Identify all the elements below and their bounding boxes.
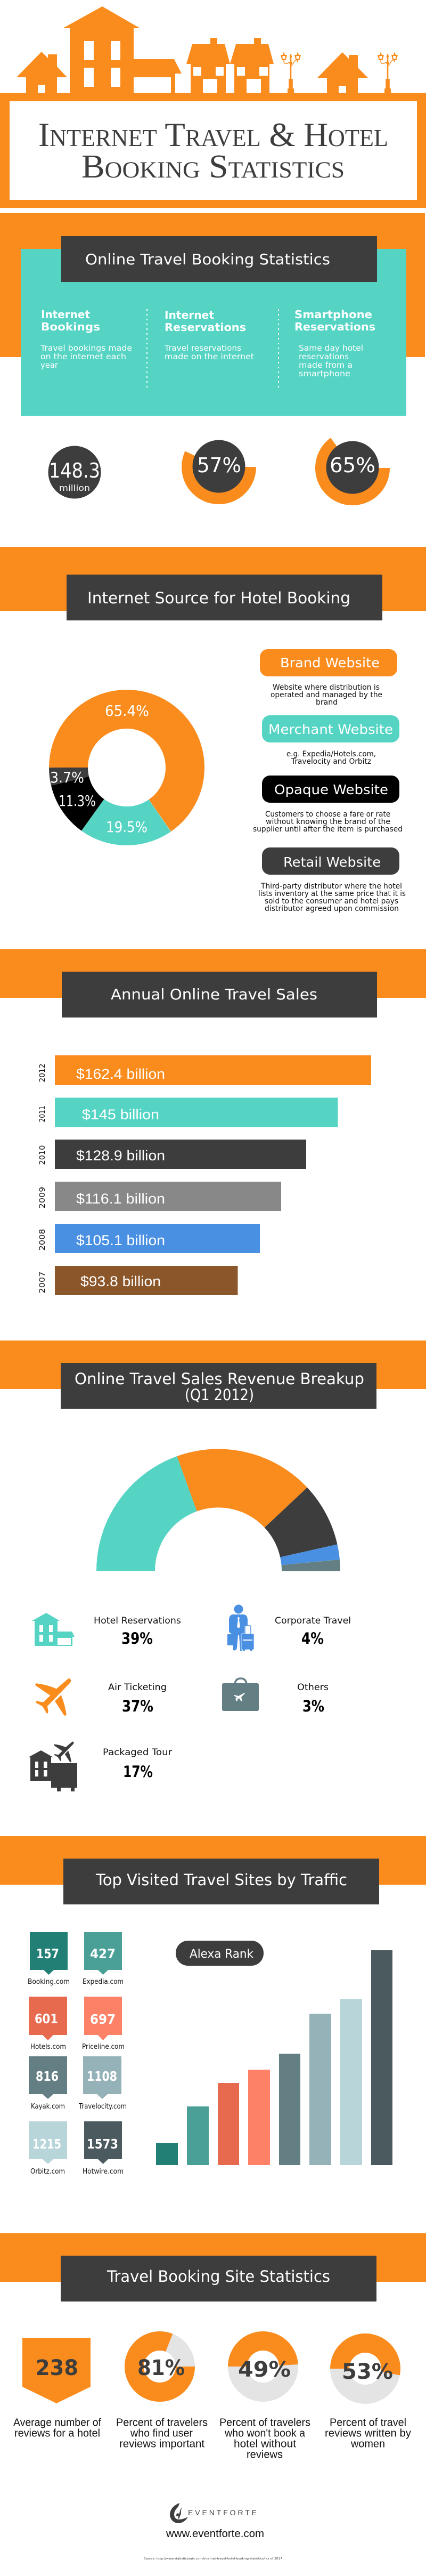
tag: hotels.com <box>29 1997 67 2051</box>
stat: 81 percent donut: Percent of travelers <box>116 2417 208 2428</box>
bar chart: yearly sales <box>38 1055 371 1295</box>
stat: 53 percent donut: 53% <box>342 2360 393 2384</box>
stat: 49 percent donut <box>219 2341 310 2460</box>
column: smartphone reservations: Same day hotel <box>299 343 363 353</box>
bar 2007: 2007 <box>38 1272 47 1293</box>
section heading: Online Travel Sales Revenue Breakup <box>75 1370 364 1388</box>
stat: packaged tour <box>103 1747 172 1781</box>
stat: 49 percent donut: 49% <box>238 2357 291 2382</box>
stat: packaged tour: Packaged Tour <box>103 1747 172 1758</box>
tag: orbitz.com <box>29 2121 67 2176</box>
legend: opaque website: Customers to choose a fare or rate <box>265 810 390 819</box>
legend: retail website: distributor agreed upon commission <box>265 905 399 913</box>
legend: retail website: lists inventory at the same price that it is <box>258 890 406 898</box>
stat: corporate travel <box>275 1616 351 1648</box>
legend: opaque website: Opaque Website <box>274 782 388 797</box>
tag: orbitz.com: Orbitz.com <box>30 2168 65 2176</box>
logo: eventforte <box>170 2503 257 2523</box>
donut chart: 3.7% <box>50 769 84 786</box>
icon: twin house one <box>186 38 230 94</box>
tag: hotwire.com: Hotwire.com <box>83 2168 124 2176</box>
column: smartphone reservations: made from a <box>299 360 353 370</box>
icon: airplane <box>35 1678 71 1716</box>
icon: small house right <box>317 52 368 94</box>
stat: 81 percent donut: 81% <box>137 2356 185 2380</box>
stat: 49 percent donut: hotel without <box>234 2438 296 2450</box>
legend: brand website: Brand Website <box>280 655 380 671</box>
stat: 238 reviews badge: reviews for a hotel <box>14 2427 100 2439</box>
stat: 81 percent donut: reviews important <box>119 2438 204 2450</box>
tag: hotwire.com <box>83 2121 124 2176</box>
bar 2010: 2010 <box>38 1145 47 1165</box>
stat: hotel reservations: 39% <box>121 1629 153 1648</box>
donut chart: 65.4% <box>105 702 149 720</box>
tag: booking.com: 157 <box>36 1946 59 1961</box>
tag: hotwire.com: 1573 <box>87 2136 118 2152</box>
legend: brand website <box>260 649 397 707</box>
legend: merchant website: e.g. Expedia/Hotels.com, <box>286 750 376 758</box>
legend: brand website: Website where distribution is <box>273 683 380 692</box>
stat: 49 percent donut: reviews <box>247 2449 283 2460</box>
legend: merchant website: Merchant Website <box>268 722 393 737</box>
column: internet reservations <box>164 309 254 361</box>
stat: corporate travel: Corporate Travel <box>275 1616 351 1626</box>
tag: expedia.com <box>83 1932 124 1986</box>
panel: top visited travel sites <box>0 1836 426 2176</box>
tag: priceline.com: 697 <box>90 2012 116 2027</box>
legend: brand website: brand <box>316 698 338 707</box>
stat: others: Others <box>297 1682 329 1693</box>
tag: expedia.com: Expedia.com <box>83 1978 124 1986</box>
icon: corporate traveller <box>227 1604 254 1651</box>
title text <box>38 116 388 185</box>
legend pill: alexa rank <box>176 1941 264 1966</box>
column: internet reservations: Internet <box>165 309 214 321</box>
title text: Booking Statistics <box>81 149 345 185</box>
tag: booking.com: Booking.com <box>28 1978 70 1986</box>
stat: 49 percent donut: Percent of travelers <box>219 2417 310 2428</box>
column: internet bookings: year <box>40 360 59 370</box>
bar 2010 <box>38 1140 306 1169</box>
bar 2012: $162.4 billion <box>76 1066 165 1082</box>
bar 2008: $105.1 billion <box>76 1232 165 1248</box>
tag: kayak.com: 816 <box>36 2069 59 2084</box>
tag: kayak.com: Kayak.com <box>31 2103 65 2111</box>
bar 2011 <box>38 1098 338 1127</box>
column: smartphone reservations: reservations <box>299 352 349 361</box>
stat: 53 percent donut: reviews written by <box>325 2427 411 2439</box>
stat: hotel reservations: Hotel Reservations <box>94 1616 181 1626</box>
column: internet bookings <box>40 308 132 370</box>
tag: travelocity.com: 1108 <box>87 2069 117 2084</box>
stat: air ticketing <box>108 1682 167 1715</box>
stat: 238 reviews badge <box>13 2338 101 2439</box>
section heading: (Q1 2012) <box>185 1386 254 1404</box>
donut chart: 11.3% <box>59 792 96 810</box>
stat: others: 3% <box>302 1697 324 1715</box>
tag: expedia.com: 427 <box>90 1946 116 1961</box>
section heading: Top Visited Travel Sites by Traffic <box>95 1871 347 1889</box>
tag: travelocity.com <box>78 2056 127 2111</box>
donut chart: 19.5% <box>106 818 148 836</box>
legend: retail website: Third-party distributor where the hotel <box>260 882 402 891</box>
bar 2008: 2008 <box>38 1229 47 1250</box>
section heading <box>63 1859 379 1904</box>
stat: 148.3 million: million <box>59 483 90 493</box>
tag: booking.com <box>28 1932 70 1986</box>
column: internet bookings: Internet <box>41 308 90 321</box>
tag: hotels.com: 601 <box>35 2011 58 2026</box>
section heading: Travel Booking Site Statistics <box>106 2267 330 2286</box>
column: internet reservations: Travel reservations <box>164 343 241 353</box>
tag: priceline.com <box>82 1997 125 2051</box>
stat: 53 percent donut: women <box>350 2438 385 2450</box>
bar 2009: 2009 <box>38 1186 47 1209</box>
panel: travel booking site statistics <box>0 2233 426 2460</box>
column: smartphone reservations: Smartphone <box>294 308 372 321</box>
bar 2007 <box>38 1266 237 1295</box>
stat: others <box>297 1682 329 1715</box>
column: smartphone reservations <box>294 308 375 378</box>
legend: brand website: operated and managed by the <box>271 691 382 699</box>
legend: merchant website: Travelocity and Orbitz <box>291 757 371 766</box>
column: smartphone reservations: Reservations <box>294 320 375 333</box>
stat: corporate travel: 4% <box>301 1629 324 1648</box>
bar 2007: $93.8 billion <box>80 1273 161 1289</box>
stat: 57 percent radial <box>182 440 256 504</box>
column: internet reservations: made on the internet <box>165 352 254 361</box>
column: internet bookings: on the internet each <box>40 352 126 361</box>
bar 2012 <box>38 1055 371 1085</box>
stat: 238 reviews badge: Average number of <box>13 2417 101 2428</box>
bar 2010: $128.9 billion <box>76 1148 165 1164</box>
column: internet reservations: Reservations <box>165 321 246 334</box>
half donut chart <box>87 1440 349 1702</box>
panel: online travel booking statistics <box>0 213 425 416</box>
panel: online travel sales revenue breakup <box>0 1341 426 1791</box>
icon: twin house two <box>230 38 274 94</box>
title text: Internet Travel & Hotel <box>38 116 388 154</box>
stat: 65 percent radial: 65% <box>330 454 375 477</box>
bar 2012: 2012 <box>38 1064 47 1082</box>
icon: small house left <box>17 52 67 94</box>
logo: eventforte: EVENTFORTE <box>188 2508 257 2517</box>
legend: merchant website <box>262 715 399 766</box>
icon: large house with garage <box>63 6 182 94</box>
header illustration: orange town skyline <box>17 6 398 94</box>
stat: air ticketing: Air Ticketing <box>108 1682 167 1693</box>
section heading <box>61 1363 376 1409</box>
icon: street lamp two <box>378 52 398 93</box>
tag: kayak.com <box>29 2056 67 2111</box>
stat: air ticketing: 37% <box>122 1697 153 1715</box>
stat: 81 percent donut: who find user <box>130 2427 193 2439</box>
legend: retail website <box>258 847 406 913</box>
bar 2009: $116.1 billion <box>76 1191 165 1207</box>
stat: 81 percent donut <box>116 2341 208 2450</box>
section heading: Online Travel Booking Statistics <box>85 251 330 268</box>
stat: 148.3 million: 148.3 <box>49 459 100 482</box>
section heading <box>67 575 382 620</box>
legend: retail website: Retail Website <box>283 854 381 870</box>
panel: internet source for hotel booking <box>0 547 426 913</box>
section heading: Annual Online Travel Sales <box>111 986 317 1003</box>
section heading <box>61 236 377 282</box>
column: internet bookings: Bookings <box>41 320 100 333</box>
source note: Source: http://www.statisticbrain.com/internet-travel-hotel-booking-statistics/ as of 2017 <box>144 2557 283 2561</box>
section heading <box>61 2256 376 2302</box>
stat: 53 percent donut: Percent of travel <box>330 2417 406 2428</box>
legend pill: alexa rank: Alexa Rank <box>190 1948 253 1961</box>
tag: priceline.com: Priceline.com <box>82 2043 125 2051</box>
icon: street lamp one <box>281 52 301 93</box>
tag: hotels.com: Hotels.com <box>30 2043 66 2051</box>
legend: opaque website: without knowing the brand of the <box>266 818 390 826</box>
legend: retail website: sold to the consumer and hotel pays <box>265 897 398 906</box>
stat: 49 percent donut: who won't book a <box>224 2427 306 2439</box>
website url: www.eventforte.com <box>166 2528 264 2540</box>
section heading <box>62 972 377 1018</box>
bar 2011: $145 billion <box>82 1107 159 1123</box>
icon: hotel <box>32 1613 75 1646</box>
tag: travelocity.com: Travelocity.com <box>78 2103 127 2111</box>
column: internet bookings: Travel bookings made <box>40 343 132 353</box>
stat: packaged tour: 17% <box>123 1763 153 1781</box>
bar 2009 <box>38 1182 281 1211</box>
legend: opaque website <box>253 776 403 834</box>
stat: 65 percent radial <box>315 438 390 505</box>
icon: packaged tour <box>28 1742 77 1791</box>
panel: annual online travel sales <box>0 949 426 1295</box>
bar chart: alexa rank <box>156 1950 392 2165</box>
stat: 238 reviews badge: 238 <box>36 2356 78 2380</box>
stat: hotel reservations <box>94 1616 181 1648</box>
stat: 148.3 million <box>48 446 101 499</box>
bar 2008 <box>38 1224 260 1253</box>
title banner <box>0 93 426 208</box>
column: smartphone reservations: smartphone <box>299 369 350 378</box>
stat: 53 percent donut <box>325 2343 411 2450</box>
bar 2011: 2011 <box>38 1105 47 1123</box>
donut chart <box>45 686 208 849</box>
section heading: Internet Source for Hotel Booking <box>87 589 350 607</box>
stat: 57 percent radial: 57% <box>197 454 241 477</box>
legend: opaque website: supplier until after the item is purchased <box>253 825 403 834</box>
tag: orbitz.com: 1215 <box>32 2136 61 2152</box>
icon: briefcase <box>222 1678 259 1711</box>
